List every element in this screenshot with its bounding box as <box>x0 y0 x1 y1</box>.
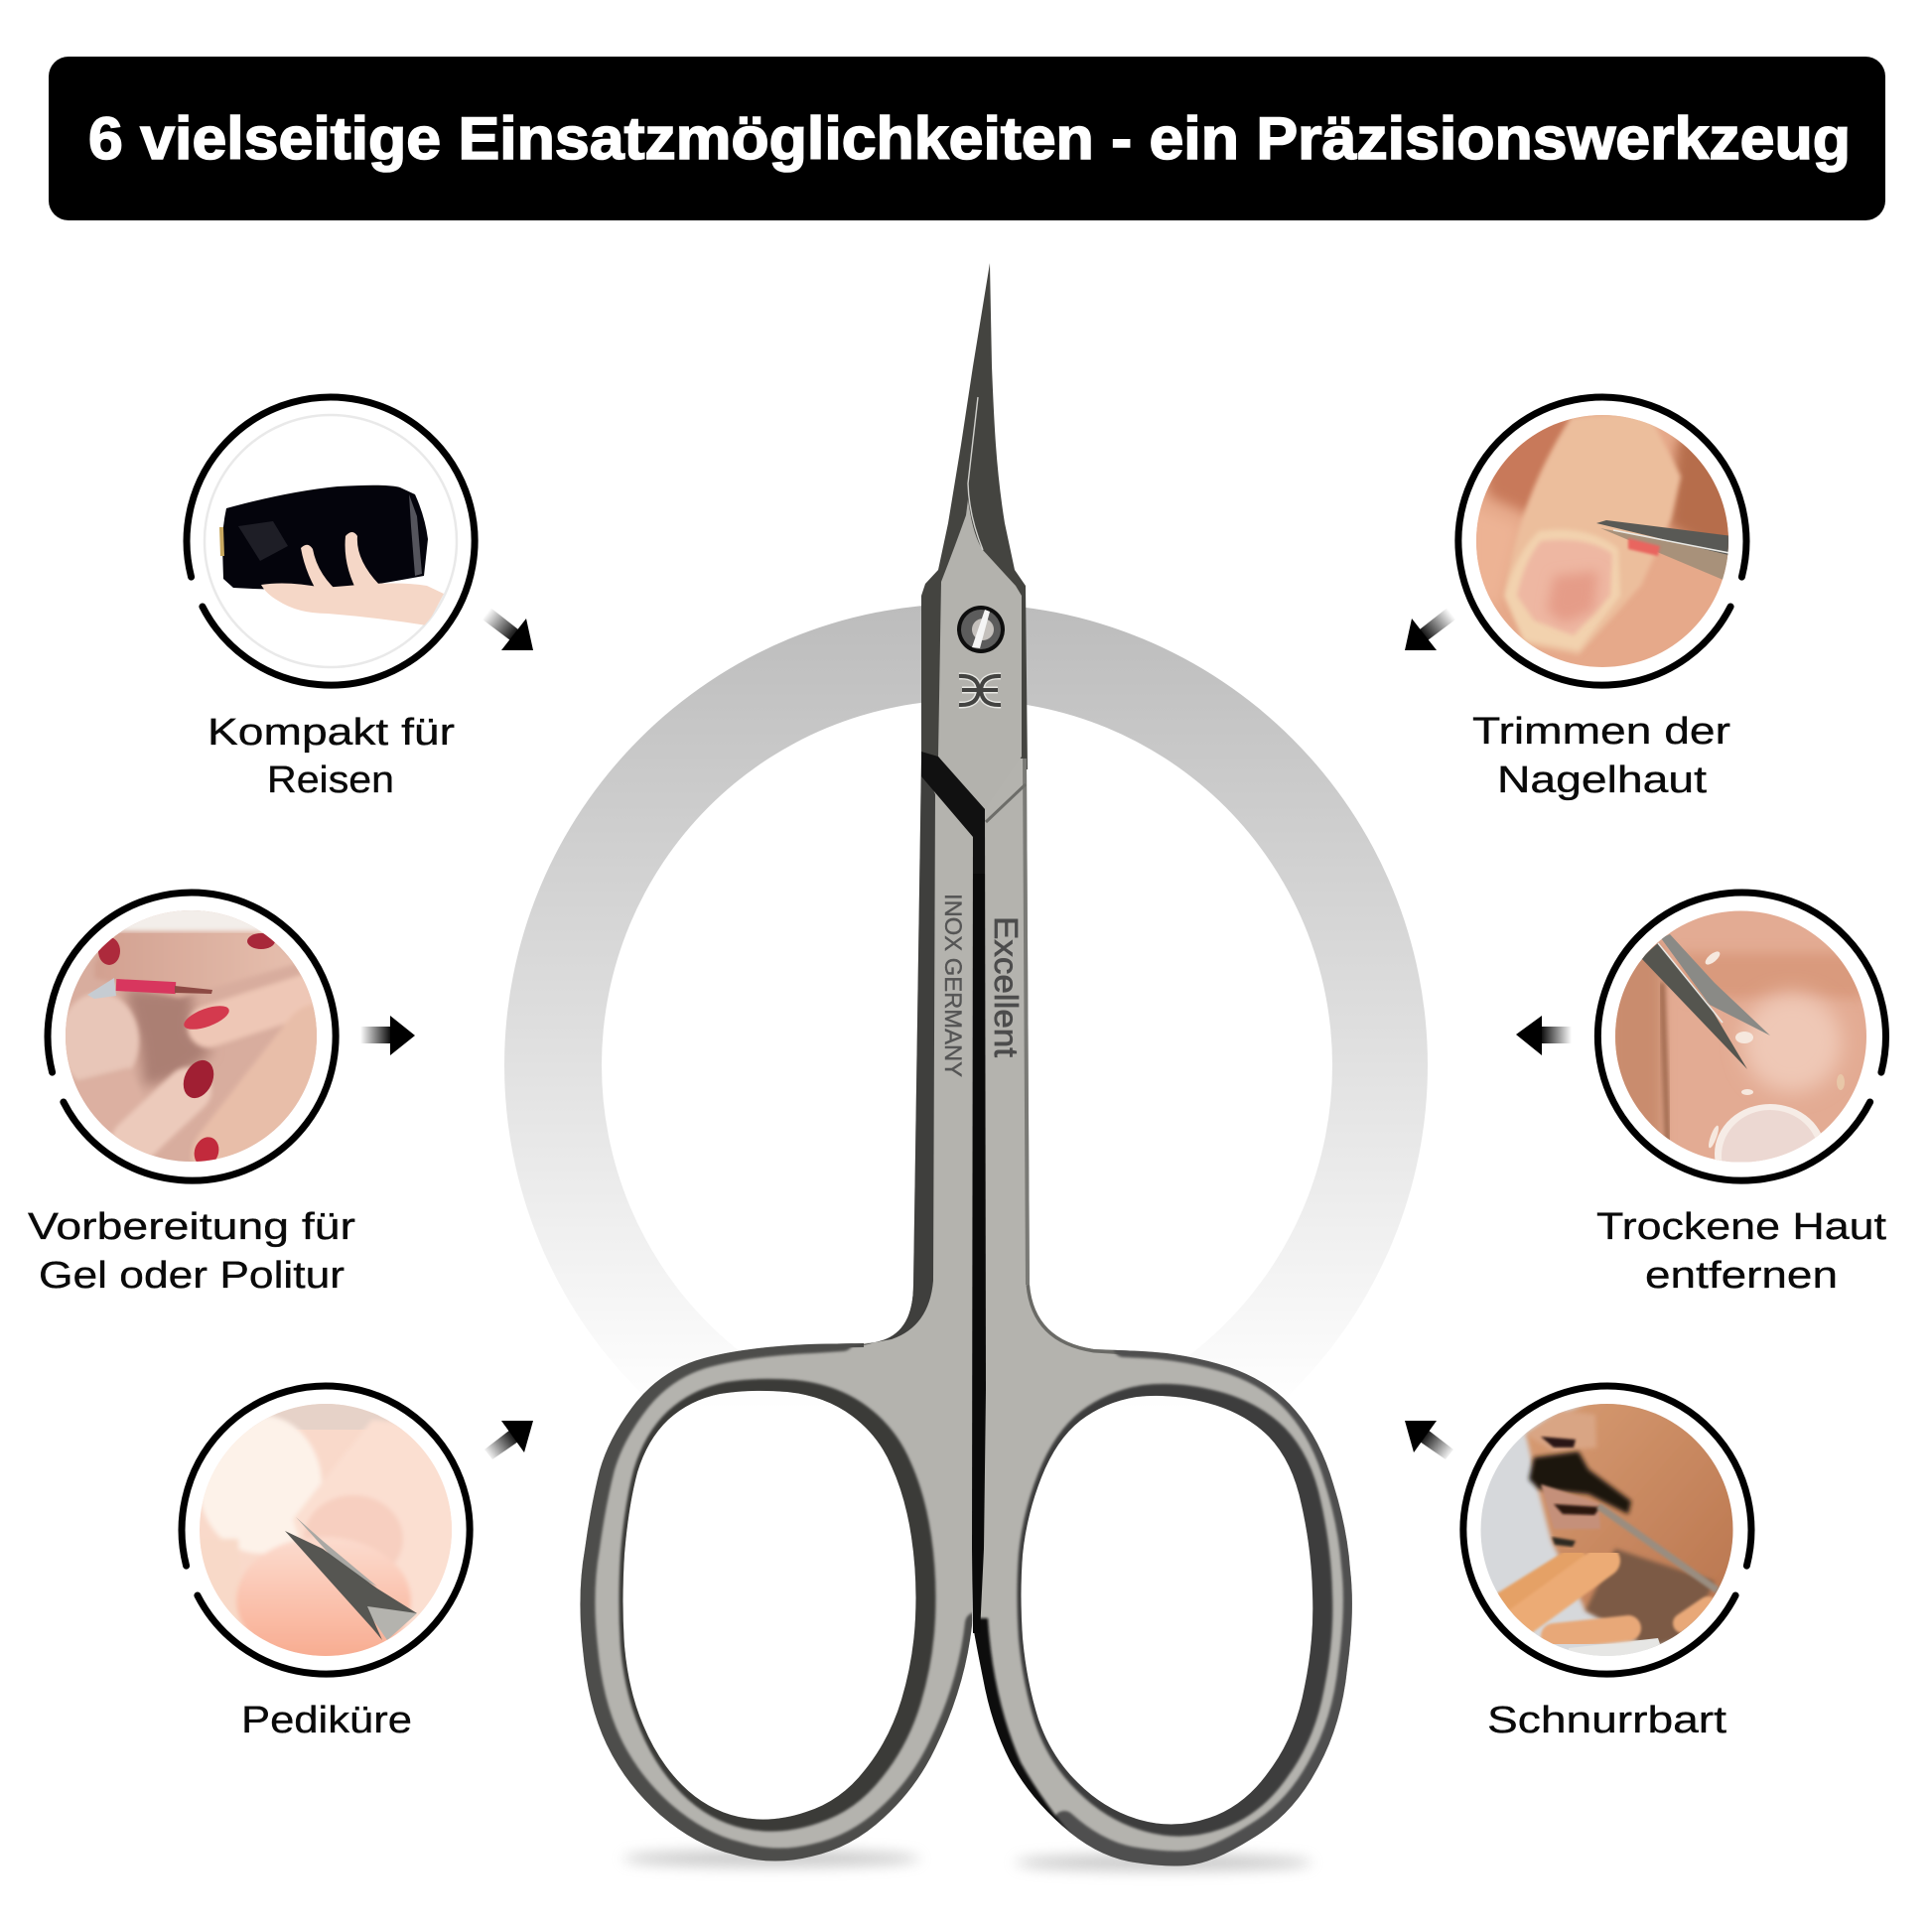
photo: nail and scissors <box>1469 412 1737 672</box>
pivot head plate <box>938 499 1022 809</box>
arrow <box>360 1016 415 1055</box>
left handle <box>566 745 983 1876</box>
right shank bevel line <box>986 784 1026 822</box>
label <box>1596 1206 1887 1297</box>
right handle <box>963 745 1370 1876</box>
engraving: INOX GERMANY: INOX GERMANY <box>939 894 966 1077</box>
label: Vorbereitung für <box>28 1206 355 1248</box>
use case: pedicure <box>182 1386 533 1741</box>
use case: cuticle trimming <box>1405 397 1746 801</box>
label: entfernen <box>1645 1255 1838 1297</box>
ring <box>1463 1386 1751 1674</box>
use case: travel <box>187 397 533 801</box>
diagonal dark band <box>921 752 985 874</box>
use case: gel preparation <box>28 893 415 1297</box>
label: Nagelhaut <box>1497 759 1708 801</box>
title text: 6 vielseitige Einsatzmöglichkeiten - ein Präzisionswerkzeug <box>88 105 1851 172</box>
label <box>1472 711 1730 801</box>
photo: dry skin and scissors <box>1615 911 1866 1162</box>
use case: moustache <box>1405 1386 1751 1741</box>
blade highlight <box>968 397 983 550</box>
brand logo <box>959 676 1001 705</box>
ring <box>182 1386 470 1674</box>
title banner <box>49 57 1885 220</box>
arrow <box>484 1421 533 1459</box>
label: Schnurrbart <box>1487 1700 1727 1741</box>
label: Gel oder Politur <box>39 1255 345 1297</box>
ground shadows <box>622 1851 1312 1870</box>
arrow <box>483 608 533 650</box>
pivot screw <box>957 606 1005 653</box>
scissors tip <box>1600 528 1732 581</box>
ring <box>187 397 475 685</box>
scissors <box>566 263 1370 1876</box>
photo: pouch in hand <box>205 415 457 667</box>
ring <box>1458 397 1746 685</box>
arrow <box>1405 1421 1453 1459</box>
blade silhouette <box>921 263 1028 769</box>
arrow <box>1516 1016 1572 1055</box>
photo: painted nails <box>66 910 317 1162</box>
label <box>207 712 455 801</box>
label <box>28 1206 355 1297</box>
label: Trimmen der <box>1472 711 1730 753</box>
engraving: Excellent: Excellent <box>988 916 1025 1057</box>
label: Kompakt für <box>207 712 455 754</box>
label: Pediküre <box>241 1700 412 1741</box>
ring <box>48 893 336 1180</box>
arrow <box>1405 608 1455 650</box>
gradient background ring <box>504 604 1428 1527</box>
photo: toe and scissors <box>200 1404 452 1656</box>
label: Trockene Haut <box>1596 1206 1887 1248</box>
centre black gap <box>972 809 986 1633</box>
scissors tip <box>1661 934 1770 1035</box>
scissors tip <box>367 1606 417 1640</box>
label: Reisen <box>267 759 394 801</box>
photo: moustache trim <box>1477 1398 1737 1668</box>
use case: dry skin <box>1516 893 1887 1297</box>
ring <box>1597 893 1885 1180</box>
